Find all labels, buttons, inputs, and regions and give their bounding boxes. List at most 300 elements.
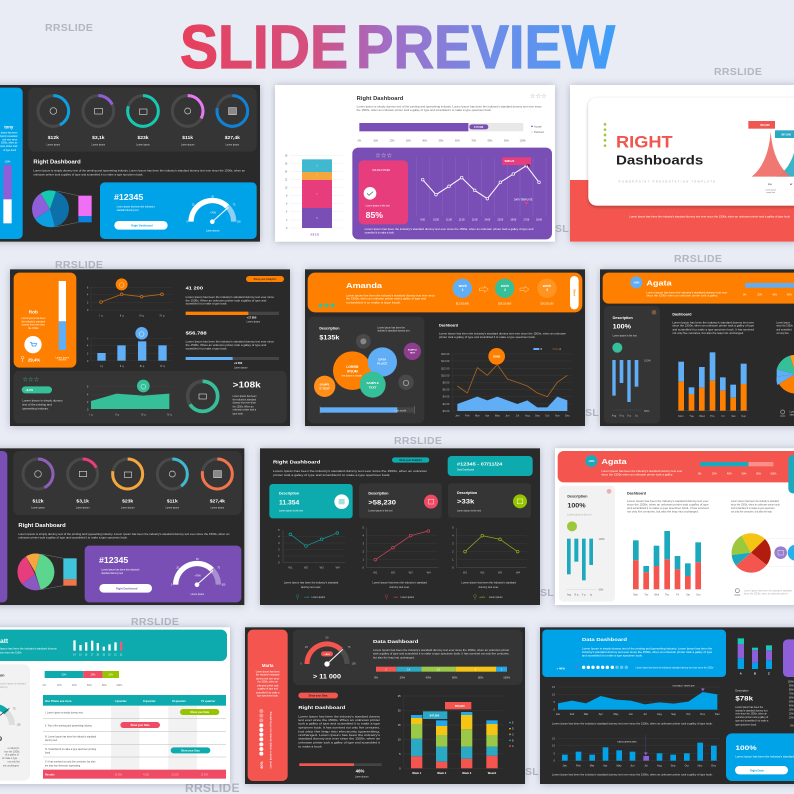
lower panel with area chart and ring: Lorem Ipsum is simply dummy bbox=[22, 399, 63, 403]
blue progress card: Lorem Ipsum has been the industry's standard bbox=[735, 756, 794, 759]
progress bar: 20% bbox=[390, 140, 394, 142]
plans table: Show your Data bbox=[181, 749, 200, 752]
orange header bbox=[308, 273, 582, 312]
bar chart: Oct bbox=[685, 763, 689, 767]
dashboard bars: since the 1500s, when an unknown printer took a galley of type bbox=[627, 503, 710, 506]
area chart: EDITABLE TEMPLATE bbox=[673, 685, 695, 688]
peak chart: FOL bbox=[768, 184, 773, 186]
bubble panel: IPSUM bbox=[347, 369, 358, 373]
stacked bar chart: C bbox=[512, 734, 514, 736]
blue progress card: 100% bbox=[735, 745, 757, 752]
ring statistics panel: Lorem ipsum bbox=[76, 507, 89, 510]
footnote: since the 1500s, when an unknown printer bbox=[744, 593, 788, 596]
description panel: Lorem ipsum is the text bbox=[567, 513, 592, 516]
bar chart: Apr bbox=[603, 763, 608, 767]
plans table: II. Text of the printing and typesetting industry. bbox=[45, 724, 93, 727]
stacked bar chart: 20 bbox=[398, 708, 401, 712]
ring statistics panel: Lorem ipsum bbox=[166, 507, 179, 510]
line chart green: 2 bbox=[452, 550, 454, 554]
area chart: Nov bbox=[700, 712, 706, 716]
stacked bar chart: Week 2 bbox=[437, 771, 447, 775]
red header: Lorem Ipsum has been the industry's standard dummy text ever bbox=[601, 470, 683, 473]
stacked bar chart: 5 bbox=[316, 218, 318, 220]
plans table: 4 200 bbox=[143, 774, 150, 776]
line chart green: W2 bbox=[480, 570, 485, 574]
line chart teal: 5 bbox=[278, 528, 280, 532]
title: PREVIEW bbox=[356, 13, 615, 81]
stacked bar chart: 15 bbox=[398, 723, 401, 727]
blue card with gauge: 75 bbox=[233, 205, 236, 207]
stacked bar chart: B bbox=[512, 740, 514, 742]
dashboard bars: Thu bbox=[665, 594, 670, 596]
lower panel with area chart and ring: 6 bbox=[87, 385, 89, 389]
heading and intro text bbox=[357, 93, 547, 112]
dashboard chart: Dec bbox=[565, 414, 570, 418]
panel: slide 9 Agata red dashboard bbox=[555, 448, 794, 605]
gauge and data panel: +46% bbox=[324, 653, 330, 656]
blue progress card: Right Dash bbox=[750, 768, 764, 772]
description panel: 100% bbox=[644, 358, 651, 362]
peak chart bbox=[748, 121, 794, 194]
gauge and data panel: 4 bbox=[475, 669, 477, 671]
dashboard bars: not only five centuries, but also the leap into unchanged. bbox=[627, 511, 699, 514]
plans table: I quarter bbox=[115, 699, 127, 703]
dashboard bars: since the 1500s, when an unknown printer took bbox=[731, 503, 780, 506]
area chart: May bbox=[613, 712, 619, 716]
lower panel with area chart and ring: >108k bbox=[233, 379, 261, 389]
gauge and data panel: 100 bbox=[351, 661, 356, 665]
ring statistics panel: Lorem ipsum bbox=[92, 143, 105, 146]
bubble panel: SAMPLE bbox=[408, 349, 417, 352]
plans table: I. Lorem Ipsum is simply dummy text. bbox=[45, 712, 84, 715]
heading and intro text: the 1500s, when an unknown printer took a galley of type and scrambled it to make a type specimen book. bbox=[357, 109, 492, 112]
text block with progress bar: unchanged. Lorem Ipsum has been the industry's bbox=[298, 733, 381, 737]
orange header: +50% bbox=[633, 282, 640, 284]
captions: Lorem ipsum bbox=[401, 596, 414, 599]
orange profile panel: the text bbox=[59, 359, 67, 362]
teal header: 14 bbox=[73, 654, 76, 656]
purple panel with line chart: 18:00 bbox=[536, 220, 543, 222]
watermarks: RRSLIDE bbox=[131, 616, 179, 628]
progress segments: 40% bbox=[72, 685, 77, 687]
purple panel with line chart: 14:00 bbox=[484, 220, 491, 222]
purple card with gauge bbox=[85, 546, 241, 602]
coral side panel: Lorem Ipsum has been bbox=[256, 670, 280, 673]
line chart green: W4 bbox=[516, 570, 521, 574]
statistics column bbox=[186, 276, 284, 369]
teal header: 19 bbox=[102, 654, 106, 656]
footnote: Lorem Ipsum has been the industry's standard bbox=[744, 589, 793, 592]
description panel: II q bbox=[627, 414, 631, 418]
gauge and data panel: 25 bbox=[305, 645, 308, 649]
description text bbox=[735, 682, 794, 728]
panel: slide 12 data dashboard blue bbox=[540, 627, 794, 784]
ring statistics panel: $27,4k bbox=[225, 135, 240, 141]
line chart: II q bbox=[120, 313, 124, 317]
ring statistics panel: Lorem ipsum bbox=[226, 143, 239, 146]
teal header: 18 bbox=[96, 654, 100, 656]
teal header: 22 bbox=[120, 654, 123, 656]
plans table: IV quarter bbox=[201, 699, 216, 703]
description panel: Avg bbox=[567, 593, 572, 596]
dashboard chart: $14.00 bbox=[441, 359, 450, 363]
description panel: Description bbox=[567, 495, 587, 499]
stacked bar chart: 4 bbox=[286, 212, 288, 214]
description text: 100% bbox=[788, 682, 794, 684]
pie chart and notes: since the 1500s bbox=[776, 325, 793, 328]
panel: slide 2 white purple dashboard bbox=[275, 85, 555, 242]
blue card with gauge: 100 bbox=[237, 221, 241, 223]
bar chart: 0 bbox=[554, 759, 556, 763]
area chart: Jul bbox=[643, 712, 647, 716]
red header: 20% bbox=[712, 474, 717, 476]
bar chart: Jan bbox=[563, 763, 567, 767]
dashboard chart: Dashboard bbox=[439, 324, 458, 328]
line chart green: 1 bbox=[452, 558, 454, 562]
text block with progress bar: Lorem ipsum bbox=[355, 775, 368, 778]
purple panel with line chart: DATA TEMPLATE bbox=[514, 199, 533, 202]
dashboard bars: Lorem Ipsum has been the industry's standard dummy text ever bbox=[672, 321, 754, 324]
orange header: $18,250,000 bbox=[541, 303, 554, 305]
lower panel with area chart and ring: text of the printing and bbox=[22, 403, 52, 407]
panel: slide 4 Rob orange dashboard bbox=[10, 269, 290, 426]
watermarks: SL bbox=[585, 407, 599, 419]
bar chart: 10 bbox=[552, 744, 556, 748]
bar chart: Lorem Ipsum has been the industry's standard dummy text ever since the 1500s, when an unknown printer took a galley of type book. bbox=[552, 773, 713, 776]
area chart: 5 bbox=[554, 700, 556, 704]
text block with progress bar: specimen book. It has survived not only five centuries, bbox=[298, 725, 380, 729]
heading block bbox=[273, 457, 429, 477]
description panel: 100% bbox=[613, 324, 631, 331]
statistics column: Lorem ipsum bbox=[247, 320, 260, 323]
teal header: ever since the 1500s bbox=[0, 651, 22, 654]
bar chart: II q bbox=[120, 364, 124, 368]
heading and body text: unknown printer took a galley of type and scrambled it to make a type specimen book. bbox=[33, 173, 144, 176]
stacked bar chart: $47,000 bbox=[430, 713, 440, 717]
description text: 70% bbox=[789, 694, 794, 696]
white cover card bbox=[588, 98, 794, 206]
stacked bar chart: A bbox=[512, 745, 514, 748]
line chart: I q bbox=[100, 313, 103, 317]
orange header: scrambled it to make a type book. bbox=[346, 301, 402, 304]
line chart green: W3 bbox=[498, 570, 503, 574]
line chart pink: W3 bbox=[409, 570, 413, 574]
description cards: Lorem ipsum is the text bbox=[279, 510, 303, 513]
orange header: $18,250,000 bbox=[498, 303, 512, 305]
purple panel with line chart: 11:00 bbox=[446, 220, 453, 222]
line chart: III q bbox=[139, 313, 144, 317]
stacked bar chart: Week 3 bbox=[462, 771, 472, 775]
teal header: 15 bbox=[79, 654, 82, 656]
progress bar: 70% bbox=[471, 140, 476, 142]
blue header: Lorem Ipsum is simply dummy text of the printing and typesetting industry. Lorem Ipsum has been the bbox=[582, 648, 713, 651]
line chart pink: 5 bbox=[363, 526, 365, 530]
lower panel with area chart and ring: III q bbox=[141, 412, 146, 416]
coral side panel: dummy text ever since bbox=[256, 677, 280, 680]
bar chart: III q bbox=[140, 364, 145, 368]
purple card with gauge: 25 bbox=[176, 568, 180, 570]
progress segments: 50% bbox=[62, 674, 66, 676]
heading and intro text: ☆☆☆ bbox=[530, 93, 547, 100]
area chart bbox=[552, 685, 720, 725]
heading block: Right Dashboard bbox=[273, 460, 320, 466]
area chart: Sep bbox=[671, 712, 677, 716]
dashboard chart: Nov bbox=[555, 414, 560, 418]
dashboard bars: Wed bbox=[654, 594, 660, 596]
pie chart and notes bbox=[776, 321, 794, 417]
dashboard bars: Lorem Ipsum has been the industry's standard bbox=[731, 500, 780, 503]
bubble panel bbox=[308, 317, 424, 423]
description text: industry's standard dummy text bbox=[735, 709, 768, 712]
ring statistics panel bbox=[13, 451, 242, 515]
pie chart bbox=[32, 190, 92, 227]
line chart green: 0 bbox=[452, 566, 454, 570]
heading block: Lorem Ipsum has been the industry's standard dummy text ever since the 1500s, when an unknown bbox=[273, 470, 428, 473]
stacked bar chart: 12 bbox=[285, 180, 288, 182]
gauge and data panel: 1 bbox=[501, 669, 503, 671]
line chart pink: W4 bbox=[427, 570, 431, 574]
description panel: Lorem ipsum is the text bbox=[613, 335, 637, 338]
bar chart: 5 bbox=[554, 751, 556, 755]
teal header: 20 bbox=[108, 654, 111, 656]
orange profile panel: dummy text ever since bbox=[22, 324, 46, 327]
dashboard chart: printer took a galley of type and scrambled it to make a type specimen book. bbox=[439, 336, 536, 339]
gauge and data panel: Data Dashboard bbox=[373, 639, 418, 645]
stacked bar chart: 6 bbox=[286, 204, 288, 206]
captions: -10% bbox=[393, 597, 398, 599]
stacked bar chart: 8 bbox=[286, 196, 288, 198]
area chart: Apr bbox=[599, 712, 603, 716]
orange header bbox=[603, 273, 794, 304]
dashboard chart: $2.00 bbox=[443, 402, 450, 406]
line chart pink: 1 bbox=[363, 558, 365, 562]
lower panel with area chart and ring: the industry's standard bbox=[233, 398, 257, 401]
description panel: 50% bbox=[599, 590, 603, 592]
orange header: $13,500,000 bbox=[456, 303, 470, 305]
captions: Lorem Ipsum has been the industry's standard bbox=[372, 581, 427, 585]
date card: Data Dashboard bbox=[457, 469, 475, 472]
dashboard chart: $0.00 bbox=[443, 409, 450, 413]
stacked bar chart: E bbox=[512, 723, 514, 725]
bubble panel: industry's standard dummy text bbox=[377, 330, 410, 333]
bar chart bbox=[552, 735, 720, 776]
panel: slide 8 teal line charts dashboard bbox=[260, 448, 540, 605]
bar chart bbox=[87, 327, 172, 368]
dashboard bars: Sun bbox=[741, 414, 747, 418]
captions: +18% bbox=[304, 597, 310, 599]
dashboard bars: Thu bbox=[710, 414, 715, 418]
bubble panel: SAMPLE bbox=[366, 381, 379, 385]
purple card with gauge: 50 bbox=[196, 559, 199, 561]
progress bar: $ 76 000 bbox=[474, 127, 484, 129]
dashboard bars: and scrambled it to make a type specimen book. It has survived bbox=[672, 328, 755, 331]
bar chart: Aug bbox=[657, 763, 662, 767]
lower panel with area chart and ring: typesetting industry. bbox=[22, 407, 49, 411]
orange header: week bbox=[542, 284, 551, 288]
blue card with gauge: 25 bbox=[192, 205, 195, 207]
area chart: Feb bbox=[570, 712, 575, 716]
watermarks: RRSLIDE bbox=[714, 66, 762, 78]
red header: Agata bbox=[601, 457, 628, 466]
heading and body text: Right Dashboard bbox=[18, 523, 66, 529]
plans table: 12 540 bbox=[201, 774, 209, 776]
text block with progress bar: standard dummy text ever since the 1500s, when an bbox=[298, 737, 381, 741]
dashboard chart bbox=[439, 324, 572, 418]
teal header: 17 bbox=[91, 654, 94, 656]
gauge and data panel: Lorem Ipsum has been the industry's standard dummy text ever since the 1500s, when an unknown printer bbox=[373, 649, 510, 652]
peak chart: simple text bbox=[766, 191, 776, 194]
gauge and data panel bbox=[293, 630, 522, 685]
statistics column: +9 560 bbox=[234, 361, 243, 365]
gauge and data panel: 40% bbox=[426, 676, 432, 680]
blue header: Lorem Ipsum has been the industry's standard dummy text ever since the 1500s bbox=[636, 667, 714, 670]
white cover card: POWERPOINT PRESENTATION TEMPLATE bbox=[619, 179, 715, 183]
purple card with gauge: 100 bbox=[221, 584, 226, 586]
gauge and data panel: 2,4 bbox=[407, 669, 411, 671]
captions: Lorem ipsum bbox=[312, 596, 325, 599]
lower panel with area chart and ring: IV q bbox=[167, 412, 172, 416]
bar chart: Jul bbox=[644, 763, 648, 767]
purple card with gauge: Lorem ipsum bbox=[191, 593, 204, 596]
bubble panel: PLACE bbox=[377, 362, 387, 366]
description cards: Lorem ipsum is the text bbox=[457, 509, 481, 512]
plans table: IV. Scrambled it to make a type specimen printing bbox=[45, 748, 97, 751]
description cards: Lorem ipsum is the text bbox=[368, 510, 393, 513]
stacked bar chart: 2 bbox=[286, 220, 288, 222]
purple panel with line chart: ONLINE POWER bbox=[372, 170, 390, 172]
line chart: 2 bbox=[87, 300, 89, 304]
watermarks: SL bbox=[555, 223, 569, 235]
pie chart bbox=[17, 554, 77, 590]
ring statistics panel: Lorem ipsum bbox=[211, 507, 224, 510]
dashboard bars: and scrambled it to make a type specimen book. It has survived bbox=[627, 507, 710, 510]
pie chart bbox=[732, 533, 794, 573]
plans table: 25 500 bbox=[115, 774, 123, 776]
bubble panel: E TEXT bbox=[319, 386, 330, 390]
area chart: 15 bbox=[552, 685, 556, 689]
peak chart: Lorem ipsum bbox=[765, 189, 776, 191]
plans table: Show your Data bbox=[131, 724, 150, 727]
description panel: III q bbox=[574, 594, 579, 596]
orange profile panel: Lorem ipsum bbox=[56, 356, 69, 359]
ring statistics panel: $23k bbox=[122, 498, 133, 504]
orange header: Week bbox=[572, 289, 576, 297]
description panel: 50% bbox=[644, 409, 650, 413]
orange header: Lorem Ipsum has been the industry's standard dummy text ever since bbox=[346, 294, 436, 297]
purple panel with line chart: 16:00 bbox=[510, 220, 517, 222]
pie chart and notes: not only five bbox=[776, 332, 789, 335]
bubble panel: TEXT bbox=[369, 385, 377, 389]
text block with progress bar: unknown printer took a galley of type and scrambled it bbox=[298, 740, 380, 744]
gauge and data panel: but also the leap into unchanged. bbox=[373, 656, 415, 659]
dashboard chart: Lorem Ipsum has been the industry's standard dummy text ever since the 1500s, when an unknown bbox=[439, 332, 567, 335]
area chart: Oct bbox=[686, 712, 691, 716]
ring statistics panel: $12k bbox=[32, 498, 44, 504]
purple panel with line chart: Lorem ipsum is the text bbox=[366, 204, 390, 207]
watermarks: RRSLIDE bbox=[45, 22, 93, 34]
panel: slide 3 cover Right Dashboards bbox=[570, 85, 794, 242]
line chart teal: W2 bbox=[304, 565, 309, 569]
bubble panel: SAMPL bbox=[319, 382, 330, 386]
stacked bar chart: 10 bbox=[285, 188, 288, 190]
red header: 40% bbox=[727, 474, 732, 476]
description panel: Iq bbox=[635, 414, 638, 418]
dashboard chart: B bbox=[541, 349, 543, 351]
purple panel with line chart: $980.20 bbox=[505, 159, 515, 163]
description text: 60% bbox=[789, 698, 794, 700]
bubble panel: Lorem ipsum has been the bbox=[377, 326, 406, 329]
line chart teal: W1 bbox=[288, 565, 293, 569]
teal header: 16 bbox=[85, 654, 88, 656]
progress bar: Planned bbox=[534, 130, 544, 134]
red header: 100% bbox=[770, 474, 776, 476]
bar chart: Feb bbox=[576, 763, 581, 767]
text block with progress bar: text ever since the 1500s. When an unknown printer bbox=[298, 718, 380, 722]
progress segments bbox=[43, 671, 122, 687]
stacked bar chart: 3 bbox=[316, 166, 318, 168]
dashboard chart: A bbox=[559, 348, 561, 351]
teal header bbox=[0, 630, 227, 661]
blue side panel: +20% bbox=[4, 161, 10, 163]
blue card with gauge: Lorem ipsum bbox=[206, 230, 219, 233]
orange profile panel: the industry's standard bbox=[22, 320, 46, 323]
captions: Lorem Ipsum has been the industry's standard bbox=[284, 581, 339, 585]
area chart: Lorem Ipsum has been the industry's standard dummy text ever since the 1500s, when an unknown printer took a galley of type book. bbox=[552, 722, 713, 725]
ring statistics panel: $11k bbox=[182, 135, 193, 141]
stacked bar chart: D bbox=[512, 729, 514, 731]
line chart: 6 bbox=[87, 285, 89, 289]
gauge panel: ok a galley of bbox=[5, 755, 19, 757]
stacked bar chart: 18 bbox=[285, 155, 288, 157]
plans table bbox=[43, 695, 226, 779]
dashboard bars: Mon bbox=[633, 594, 639, 596]
date card: #12345 - 07/11/24 bbox=[457, 461, 503, 466]
gauge and data panel: took a galley of type and scrambled it to make a type specimen book. It has survived not only five centuries, bbox=[373, 653, 510, 656]
line chart teal: 0 bbox=[278, 560, 280, 564]
dashboard bars: Dashboard bbox=[672, 313, 691, 317]
bar chart: 4 bbox=[87, 344, 89, 348]
plans table: V. It has survived not only five centuries, but also bbox=[45, 761, 96, 764]
lower panel with area chart and ring: 4 bbox=[87, 392, 89, 396]
description text: type and scrambled it to make a bbox=[735, 719, 769, 722]
orange header: week bbox=[500, 284, 509, 288]
captions: dummy text ever. bbox=[301, 585, 321, 589]
purple panel with line chart: 15:00 bbox=[497, 220, 504, 222]
plans table: II quarter bbox=[143, 699, 157, 703]
lower panel with area chart and ring: the 1500s. When an bbox=[233, 405, 254, 408]
description cards: >58,230 bbox=[368, 499, 397, 506]
red header bbox=[558, 451, 794, 493]
lower panel with area chart and ring: Lorem Ipsum has been bbox=[233, 395, 257, 398]
purple panel with line chart: 17:00 bbox=[523, 220, 530, 222]
text block with progress bar: Show your Data bbox=[309, 695, 328, 698]
gauge panel: not only five bbox=[8, 760, 21, 763]
teal header: att bbox=[0, 638, 9, 645]
lower panel with area chart and ring: type book. bbox=[233, 412, 244, 415]
dashboard chart: Jun bbox=[505, 414, 510, 418]
description text: 40% bbox=[789, 706, 794, 708]
blue progress card bbox=[726, 733, 794, 781]
description text: $78k bbox=[735, 696, 754, 703]
coral side panel bbox=[248, 630, 288, 781]
purple card with gauge: Lorem Ipsum has been the industry's bbox=[101, 569, 140, 572]
teal header: 21 bbox=[114, 654, 117, 656]
blue side panel bbox=[0, 88, 23, 239]
bar chart: Jun bbox=[630, 763, 635, 767]
small stacked bars: C bbox=[768, 672, 770, 676]
watermarks: RRSLIDE bbox=[55, 259, 103, 271]
plans table: book. bbox=[45, 753, 51, 755]
